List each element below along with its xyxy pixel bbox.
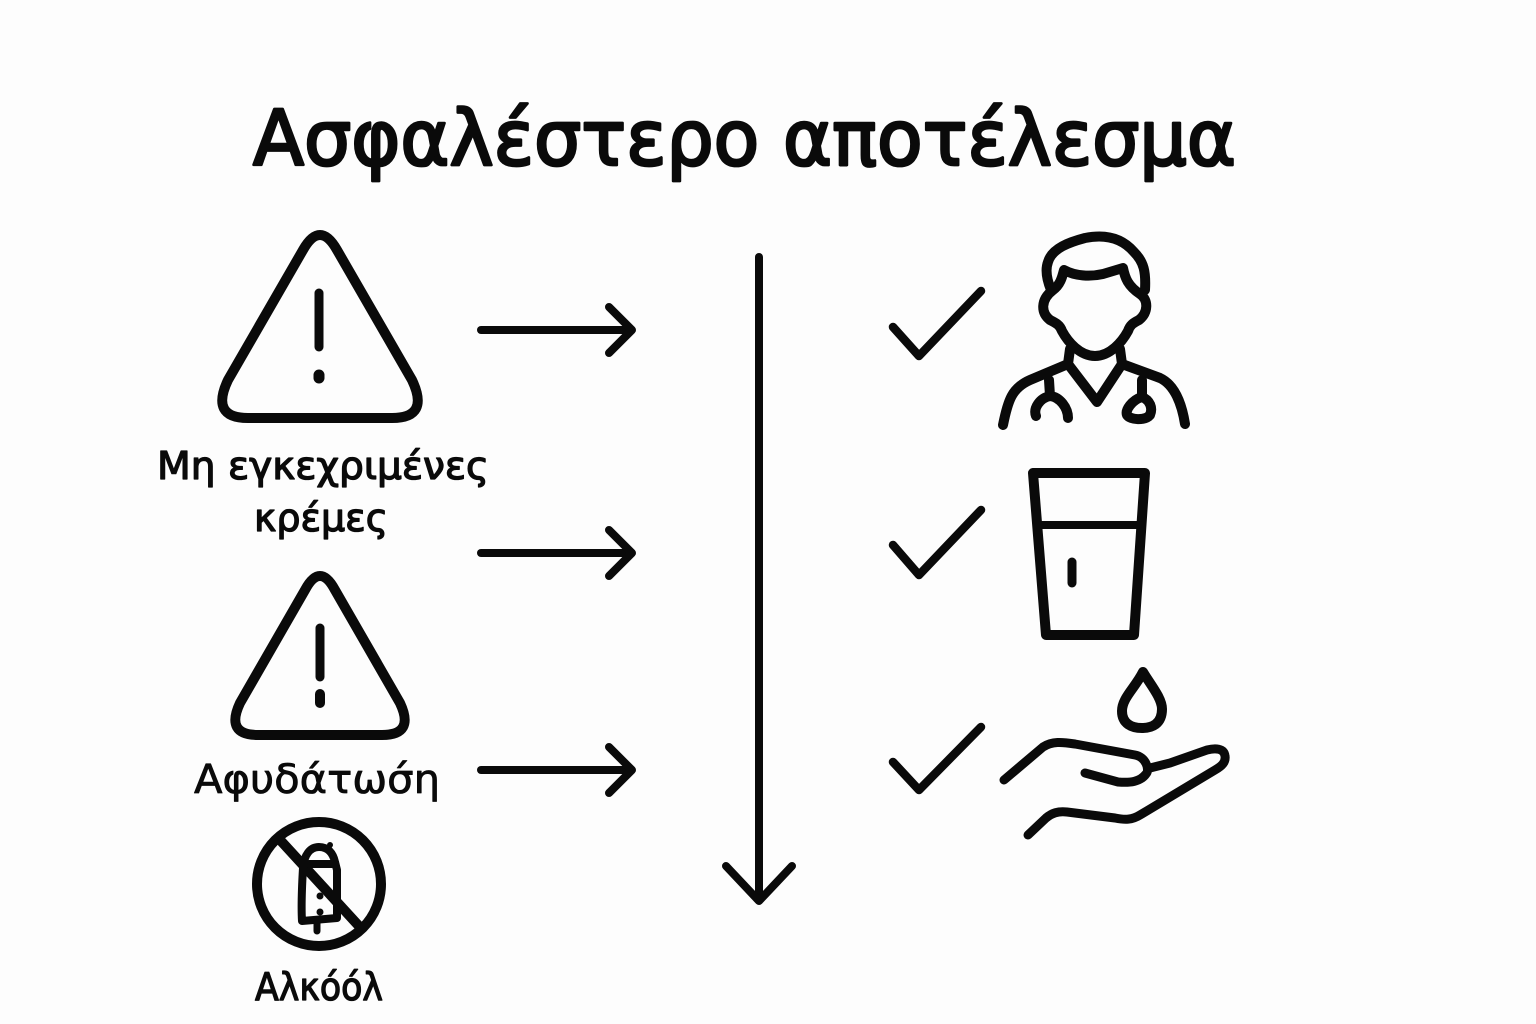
arrow: row 1	[481, 307, 632, 353]
label: unapproved creams: κρέμες	[254, 496, 388, 540]
label: unapproved creams: Μη εγκεχριμένες	[157, 444, 489, 488]
icon: check 1	[893, 291, 981, 356]
title: Ασφαλέστερο αποτέλεσμα	[253, 95, 1236, 184]
arrow: long vertical	[726, 257, 792, 901]
icon: warning triangle, unapproved creams	[222, 235, 418, 418]
icon: check 2	[893, 510, 981, 575]
label: dehydration: Αφυδάτωσ́η	[194, 757, 440, 803]
icon: glass of water	[1033, 473, 1145, 635]
arrow: row 3	[481, 747, 632, 793]
label: unapproved creams	[157, 444, 489, 540]
icon: doctor	[1003, 237, 1185, 425]
icon: hand with water drop	[1004, 672, 1225, 835]
label: alcohol: Αλκόόλ	[255, 965, 383, 1009]
arrow: row 2	[481, 530, 632, 576]
icon: check 3	[893, 727, 981, 790]
icon: warning triangle, dehydration	[235, 576, 405, 735]
icon: no alcohol	[257, 822, 381, 946]
